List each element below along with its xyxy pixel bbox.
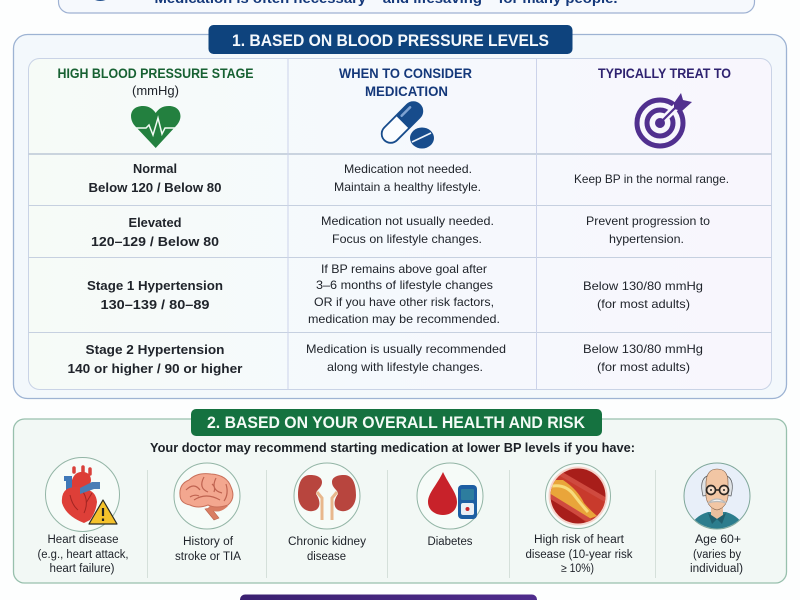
label xyxy=(526,534,633,575)
header: stage: HIGH BLOOD PRESSURE STAGE xyxy=(58,66,254,81)
row: stage 1: 3–6 months of lifestyle changes xyxy=(316,278,493,292)
row: stage 1: medication may be recommended. xyxy=(308,312,500,326)
icon: green heart with pulse xyxy=(131,106,180,148)
item: kidney xyxy=(288,463,366,563)
heading: section 1 banner: 1. BASED ON BLOOD PRESSURE LEVELS xyxy=(232,31,549,50)
item: diabetes xyxy=(417,463,483,548)
row: elevated: hypertension. xyxy=(609,232,684,246)
row: elevated: Focus on lifestyle changes. xyxy=(332,232,482,246)
item: high risk xyxy=(526,463,633,575)
icon: blood drop and glucose meter xyxy=(428,472,477,519)
header: stage: (mmHg) xyxy=(132,84,179,98)
row: stage 2: Below 130/80 mmHg xyxy=(583,342,703,356)
icon: kidneys xyxy=(298,475,356,520)
panel: blood pressure levels xyxy=(14,25,786,398)
icon: older man xyxy=(694,468,740,528)
label: Age 60+ xyxy=(695,534,741,546)
label: Heart disease xyxy=(48,534,118,546)
label: individual) xyxy=(690,563,743,575)
panel: intro callout xyxy=(58,0,754,13)
header: stage xyxy=(58,66,254,98)
icon: intro icon fragment xyxy=(90,0,111,1)
label: Diabetes xyxy=(428,536,473,548)
row: stage 1: Stage 1 Hypertension xyxy=(87,278,223,293)
header: when to consider xyxy=(339,66,472,99)
row: stage 2: (for most adults) xyxy=(597,360,690,374)
label xyxy=(288,536,366,563)
label xyxy=(38,534,128,575)
subheading: Your doctor may recommend starting medication at lower BP levels if you have: xyxy=(150,440,635,455)
icon: brain xyxy=(180,474,233,520)
label: Chronic kidney xyxy=(288,536,366,548)
row: elevated xyxy=(91,214,710,249)
label: ≥ 10%) xyxy=(561,563,594,575)
row: normal: Keep BP in the normal range. xyxy=(574,172,729,186)
row: elevated: 120–129 / Below 80 xyxy=(91,234,219,249)
row: stage 1: Below 130/80 mmHg xyxy=(583,279,703,293)
row: normal: Below 120 / Below 80 xyxy=(88,180,222,195)
label: (varies by xyxy=(693,549,741,561)
heading: section 2 banner: 2. BASED ON YOUR OVERALL HEALTH AND RISK xyxy=(207,413,586,432)
heading: section 2 banner xyxy=(191,409,602,436)
icon: clogged artery xyxy=(548,466,608,526)
label: (e.g., heart attack, xyxy=(38,549,128,561)
row: stage 2: Stage 2 Hypertension xyxy=(86,342,225,357)
icon: heart with warning xyxy=(62,467,117,524)
row: normal: Maintain a healthy lifestyle. xyxy=(334,180,481,194)
row: stage 1: If BP remains above goal after xyxy=(321,262,487,276)
label: History of xyxy=(183,536,234,548)
label: heart failure) xyxy=(50,563,115,575)
row: stage 1: OR if you have other risk factors, xyxy=(314,295,494,309)
header: when to consider: WHEN TO CONSIDER xyxy=(339,66,472,81)
row: stage 2: 140 or higher / 90 or higher xyxy=(68,361,242,376)
table: blood pressure levels xyxy=(28,58,772,390)
label xyxy=(175,536,241,563)
header: treat to: TYPICALLY TREAT TO xyxy=(598,66,731,81)
row: elevated: Elevated xyxy=(128,215,182,230)
label xyxy=(690,534,743,575)
heading: section 3 banner fragment xyxy=(240,594,537,600)
panel: overall health and risk xyxy=(14,409,786,583)
row: stage 1 xyxy=(87,262,703,326)
icon: pill and tablet xyxy=(378,98,434,148)
label: disease (10-year risk xyxy=(526,549,633,561)
row: stage 2: along with lifestyle changes. xyxy=(327,360,483,374)
header: when to consider: MEDICATION xyxy=(365,84,448,99)
label: disease xyxy=(307,551,346,563)
row: stage 2: Medication is usually recommended xyxy=(306,342,506,356)
item: age xyxy=(684,463,750,575)
row: normal: Normal xyxy=(133,161,177,176)
row: elevated: Prevent progression to xyxy=(586,214,710,228)
item: stroke xyxy=(174,463,241,563)
row: stage 1: 130–139 / 80–89 xyxy=(100,297,210,312)
row: normal: Medication not needed. xyxy=(344,162,472,176)
item: heart disease xyxy=(38,458,128,575)
row: stage 2 xyxy=(68,342,703,376)
row: normal xyxy=(88,161,729,195)
row: elevated: Medication not usually needed. xyxy=(321,214,494,228)
icon: target with arrow xyxy=(637,93,692,146)
row: stage 1: (for most adults) xyxy=(597,297,690,311)
label: High risk of heart xyxy=(534,534,625,546)
heading: section 1 banner xyxy=(208,25,572,54)
label: stroke or TIA xyxy=(175,551,241,563)
